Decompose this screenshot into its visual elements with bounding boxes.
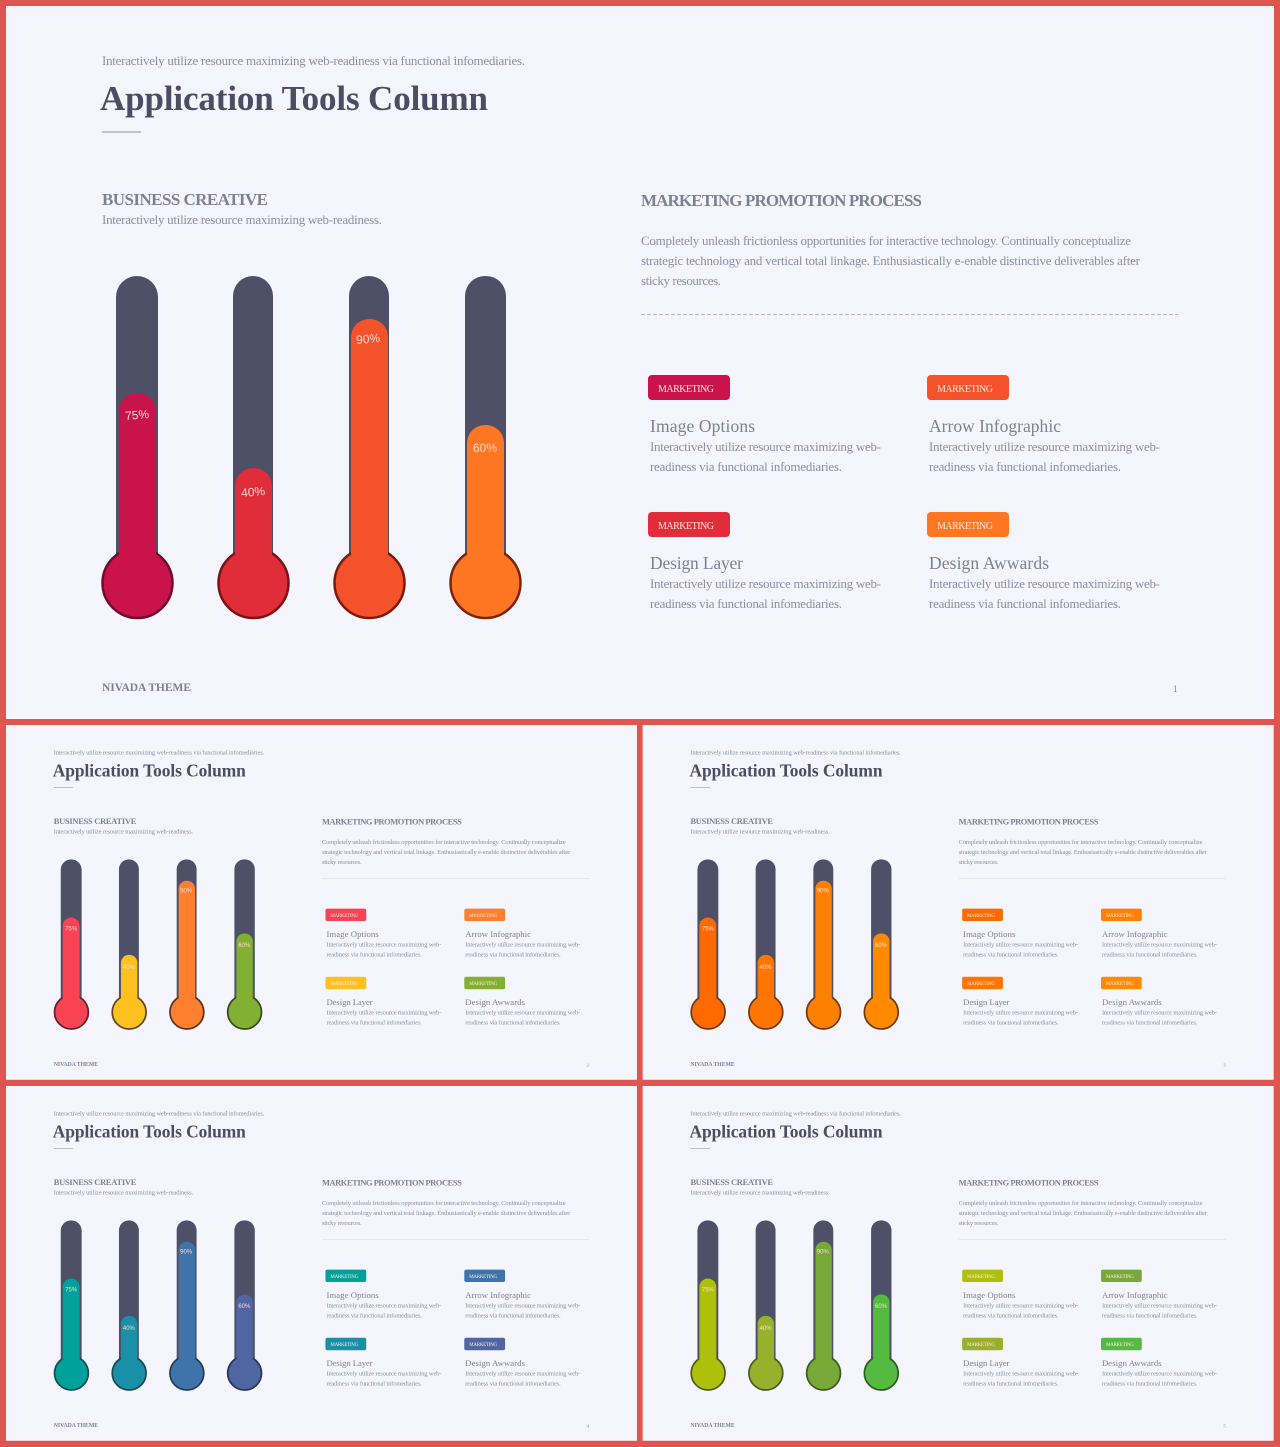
intro text: Interactively utilize resource maximizing web-readiness via functional infomediaries.	[54, 1110, 265, 1117]
thermometer 75%	[55, 1220, 88, 1390]
footer brand: NIVADA THEME	[690, 1423, 735, 1429]
page number: 3	[1223, 1062, 1226, 1067]
item: design layer: readiness via functional infomediaries.	[963, 1381, 1059, 1388]
item: arrow infographic: MARKETING	[937, 384, 993, 395]
item: image options: MARKETING	[967, 914, 995, 919]
item: arrow infographic: MARKETING	[1106, 1275, 1134, 1280]
thermometer 90%	[334, 276, 404, 618]
heading: marketing promotion process: MARKETING PROMOTION PROCESS	[959, 1178, 1099, 1188]
item: design layer: readiness via functional infomediaries.	[963, 1020, 1059, 1027]
item: design awwards: Interactively utilize resource maximizing web-	[1102, 1371, 1217, 1378]
item: arrow infographic	[927, 375, 1160, 474]
subheading: Interactively utilize resource maximizing web-readiness.	[102, 212, 382, 227]
panel: orange variant slide	[643, 725, 1274, 1080]
heading: business creative: BUSINESS CREATIVE	[54, 1177, 137, 1187]
thermometer 60%: 60%	[875, 1304, 888, 1310]
item: design layer	[962, 977, 1078, 1027]
thermometer 90%: 90%	[180, 1250, 193, 1256]
item: design awwards: readiness via functional infomediaries.	[1102, 1020, 1198, 1027]
item: image options: Image Options	[326, 929, 379, 939]
thermometer chart	[55, 1220, 262, 1390]
subheading: Interactively utilize resource maximizing web-readiness.	[690, 828, 830, 835]
item: design awwards: Design Awwards	[1102, 1358, 1162, 1368]
item: arrow infographic: Interactively utilize resource maximizing web-	[1102, 941, 1217, 948]
item: arrow infographic: Arrow Infographic	[465, 929, 531, 939]
paragraph: Completely unleash frictionless opportunities for interactive technology. Continually conceptualize	[959, 839, 1203, 846]
thermometer 75%: 75%	[65, 1287, 78, 1293]
thermometer 40%: 40%	[760, 1326, 772, 1332]
item: image options: readiness via functional infomediaries.	[326, 951, 422, 958]
item: arrow infographic: readiness via functional infomediaries.	[1102, 1312, 1198, 1319]
item: image options	[648, 375, 881, 474]
item: image options	[962, 909, 1078, 958]
item: arrow infographic: Arrow Infographic	[465, 1290, 531, 1300]
paragraph	[322, 839, 571, 866]
item: design layer: Interactively utilize resource maximizing web-	[326, 1010, 441, 1017]
item: design layer: Design Layer	[963, 997, 1010, 1007]
thermometer 90%: 90%	[180, 889, 193, 895]
item: design awwards: readiness via functional infomediaries.	[1102, 1381, 1198, 1388]
item: design awwards	[1101, 1338, 1217, 1388]
page number: 2	[587, 1062, 589, 1067]
thermometer 75%: 75%	[702, 926, 715, 932]
title: Application Tools Column	[100, 79, 488, 118]
intro text: Interactively utilize resource maximizing web-readiness via functional infomediaries.	[102, 53, 525, 68]
item: arrow infographic	[464, 909, 580, 958]
item: design layer: MARKETING	[967, 1343, 995, 1348]
thermometer 75%	[691, 859, 725, 1029]
item: image options: readiness via functional infomediaries.	[963, 951, 1059, 958]
thermometer 40%: 40%	[241, 484, 266, 500]
thermometer 40%	[112, 859, 146, 1029]
thermometer chart	[691, 859, 898, 1029]
paragraph: sticky resources.	[641, 273, 721, 288]
item: design awwards: MARKETING	[937, 521, 993, 532]
item: design layer: readiness via functional infomediaries.	[326, 1020, 422, 1027]
heading: marketing promotion process: MARKETING PROMOTION PROCESS	[322, 1178, 462, 1188]
footer brand: NIVADA THEME	[690, 1062, 735, 1068]
item: design awwards: Interactively utilize resource maximizing web-	[929, 576, 1160, 591]
item: image options	[962, 1270, 1078, 1319]
heading: marketing promotion process: MARKETING PROMOTION PROCESS	[322, 817, 462, 827]
paragraph: strategic technology and vertical total linkage. Enthusiastically e-enable distinctive deliverables after	[322, 849, 571, 856]
thermometer 60%	[864, 859, 898, 1029]
item: image options: Interactively utilize resource maximizing web-	[326, 1302, 441, 1309]
item: design awwards	[464, 1338, 580, 1388]
paragraph: Completely unleash frictionless opportunities for interactive technology. Continually conceptualize	[959, 1200, 1203, 1207]
item: arrow infographic: Arrow Infographic	[929, 416, 1061, 436]
thermometer 60%: 60%	[238, 1304, 251, 1310]
thermometer 40%	[749, 1220, 783, 1390]
intro text: Interactively utilize resource maximizing web-readiness via functional infomediaries.	[54, 749, 265, 756]
item: image options: Image Options	[963, 929, 1016, 939]
item: design layer	[325, 977, 441, 1027]
paragraph: sticky resources.	[959, 1220, 999, 1227]
thermometer 60%	[864, 1220, 898, 1390]
item: design awwards	[1101, 977, 1217, 1027]
item: design layer: Design Layer	[326, 1358, 373, 1368]
paragraph: sticky resources.	[959, 859, 999, 866]
thermometer 75%: 75%	[125, 407, 150, 423]
item: arrow infographic	[1101, 1270, 1217, 1319]
subheading: Interactively utilize resource maximizing web-readiness.	[690, 1189, 830, 1196]
item: design awwards: Interactively utilize resource maximizing web-	[465, 1010, 580, 1017]
item: design awwards: Design Awwards	[1102, 997, 1162, 1007]
intro text: Interactively utilize resource maximizing web-readiness via functional infomediaries.	[690, 749, 901, 756]
item: design layer: Design Layer	[326, 997, 373, 1007]
item: design awwards: Design Awwards	[465, 1358, 526, 1368]
item: design awwards	[927, 512, 1160, 611]
thermometer 40%: 40%	[123, 965, 136, 971]
item: arrow infographic	[464, 1270, 580, 1319]
title: Application Tools Column	[53, 1122, 246, 1142]
item: arrow infographic	[1101, 909, 1217, 958]
item: arrow infographic: Arrow Infographic	[1102, 1290, 1168, 1300]
item: arrow infographic: MARKETING	[469, 1275, 498, 1280]
item: image options	[325, 1270, 441, 1319]
item: arrow infographic: readiness via functional infomediaries.	[465, 951, 561, 958]
item: image options: Image Options	[963, 1290, 1016, 1300]
thermometer 75%	[55, 859, 88, 1029]
item: design layer: MARKETING	[658, 521, 714, 532]
item: image options: Image Options	[326, 1290, 379, 1300]
subheading: Interactively utilize resource maximizing web-readiness.	[54, 828, 193, 835]
item: arrow infographic: readiness via functional infomediaries.	[929, 459, 1121, 474]
footer brand: NIVADA THEME	[54, 1423, 98, 1429]
item: image options: readiness via functional infomediaries.	[963, 1312, 1059, 1319]
item: image options: Interactively utilize resource maximizing web-	[650, 439, 881, 454]
item: design layer: MARKETING	[330, 1343, 359, 1348]
item: design awwards: readiness via functional infomediaries.	[465, 1020, 561, 1027]
panel: green variant slide	[643, 1086, 1274, 1441]
thermometer chart	[102, 276, 520, 618]
heading: business creative: BUSINESS CREATIVE	[690, 1177, 773, 1187]
thermometer 90%: 90%	[356, 331, 381, 347]
title: Application Tools Column	[689, 761, 883, 781]
paragraph: sticky resources.	[322, 1220, 362, 1227]
item: design layer: Design Layer	[963, 1358, 1010, 1368]
paragraph: sticky resources.	[322, 859, 362, 866]
item: design layer: Interactively utilize resource maximizing web-	[650, 576, 881, 591]
page number: 1	[1173, 684, 1178, 694]
item: image options: MARKETING	[658, 384, 714, 395]
item: image options: Interactively utilize resource maximizing web-	[963, 941, 1078, 948]
item: design awwards: MARKETING	[1106, 1343, 1134, 1348]
title: Application Tools Column	[689, 1122, 883, 1142]
item: design layer: Interactively utilize resource maximizing web-	[326, 1371, 441, 1378]
item: arrow infographic: Arrow Infographic	[1102, 929, 1168, 939]
paragraph: Completely unleash frictionless opportunities for interactive technology. Continually conceptualize	[322, 1200, 566, 1207]
item: design layer: MARKETING	[330, 982, 359, 987]
item: arrow infographic: readiness via functional infomediaries.	[465, 1312, 561, 1319]
thermometer 90%: 90%	[817, 889, 829, 895]
thermometer 90%	[807, 859, 840, 1029]
item: image options: MARKETING	[330, 914, 359, 919]
item: arrow infographic: readiness via functional infomediaries.	[1102, 951, 1198, 958]
page number: 4	[587, 1423, 590, 1428]
item: image options: MARKETING	[967, 1275, 995, 1280]
item: arrow infographic: Interactively utilize resource maximizing web-	[465, 1302, 580, 1309]
thermometer 75%	[691, 1220, 725, 1390]
item: image options: Image Options	[650, 416, 755, 436]
thermometer 60%: 60%	[238, 943, 251, 949]
heading: marketing promotion process: MARKETING PROMOTION PROCESS	[959, 817, 1099, 827]
thermometer 60%: 60%	[473, 441, 497, 455]
paragraph	[641, 233, 1141, 288]
item: design layer: MARKETING	[967, 982, 995, 987]
footer brand: NIVADA THEME	[102, 682, 191, 694]
paragraph	[959, 1200, 1208, 1227]
item: arrow infographic: MARKETING	[469, 914, 498, 919]
item: arrow infographic: Interactively utilize resource maximizing web-	[465, 941, 580, 948]
thermometer 60%	[228, 1220, 262, 1390]
paragraph: strategic technology and vertical total linkage. Enthusiastically e-enable distinctive deliverables after	[959, 849, 1208, 856]
heading: business creative: BUSINESS CREATIVE	[690, 816, 773, 826]
thermometer 90%	[170, 1220, 204, 1390]
paragraph: Completely unleash frictionless opportunities for interactive technology. Continually conceptualize	[641, 233, 1131, 248]
thermometer 75%: 75%	[65, 926, 78, 932]
thermometer chart	[691, 1220, 898, 1390]
item: design layer: Design Layer	[650, 553, 743, 573]
item: design awwards: readiness via functional infomediaries.	[929, 596, 1121, 611]
thermometer 60%	[450, 276, 520, 618]
item: design awwards: Interactively utilize resource maximizing web-	[1102, 1010, 1217, 1017]
thermometer 40%	[218, 276, 288, 618]
page number: 5	[1223, 1423, 1226, 1428]
title: Application Tools Column	[53, 761, 246, 781]
intro text: Interactively utilize resource maximizing web-readiness via functional infomediaries.	[690, 1110, 901, 1117]
thermometer 40%	[112, 1220, 146, 1390]
thermometer 40%	[749, 859, 783, 1029]
footer brand: NIVADA THEME	[54, 1062, 98, 1068]
thermometer 90%	[170, 859, 204, 1029]
paragraph: strategic technology and vertical total linkage. Enthusiastically e-enable distinctive deliverables after	[959, 1210, 1208, 1217]
subheading: Interactively utilize resource maximizing web-readiness.	[54, 1189, 193, 1196]
thermometer 90%: 90%	[817, 1250, 829, 1256]
paragraph	[322, 1200, 571, 1227]
thermometer 40%: 40%	[760, 965, 772, 971]
item: design awwards: readiness via functional infomediaries.	[465, 1381, 561, 1388]
item: image options: readiness via functional infomediaries.	[650, 459, 842, 474]
item: design awwards: MARKETING	[1106, 982, 1134, 987]
item: arrow infographic: Interactively utilize resource maximizing web-	[929, 439, 1160, 454]
thermometer 90%	[807, 1220, 840, 1390]
item: design awwards	[464, 977, 580, 1027]
item: design layer	[648, 512, 881, 611]
item: design awwards: MARKETING	[469, 1343, 498, 1348]
panel: red yellow variant slide	[6, 725, 637, 1080]
item: image options: Interactively utilize resource maximizing web-	[963, 1302, 1078, 1309]
item: arrow infographic: MARKETING	[1106, 914, 1134, 919]
item: design layer: Interactively utilize resource maximizing web-	[963, 1010, 1078, 1017]
item: design layer	[962, 1338, 1078, 1388]
item: design layer: readiness via functional infomediaries.	[326, 1381, 422, 1388]
thermometer 60%	[228, 859, 262, 1029]
heading: business creative: BUSINESS CREATIVE	[102, 190, 268, 209]
item: design awwards: MARKETING	[469, 982, 498, 987]
item: design layer	[325, 1338, 441, 1388]
heading: business creative: BUSINESS CREATIVE	[54, 816, 137, 826]
heading: marketing promotion process: MARKETING PROMOTION PROCESS	[641, 191, 922, 210]
thermometer 40%: 40%	[123, 1326, 136, 1332]
item: arrow infographic: Interactively utilize resource maximizing web-	[1102, 1302, 1217, 1309]
item: image options: Interactively utilize resource maximizing web-	[326, 941, 441, 948]
thermometer 75%	[102, 276, 172, 618]
item: image options	[325, 909, 441, 958]
thermometer chart	[55, 859, 262, 1029]
item: image options: readiness via functional infomediaries.	[326, 1312, 422, 1319]
item: design layer: Interactively utilize resource maximizing web-	[963, 1371, 1078, 1378]
item: design awwards: Design Awwards	[465, 997, 526, 1007]
thermometer 60%: 60%	[875, 943, 888, 949]
paragraph: strategic technology and vertical total linkage. Enthusiastically e-enable distinctive deliverables after	[641, 253, 1141, 268]
item: design awwards: Design Awwards	[929, 553, 1049, 573]
paragraph: Completely unleash frictionless opportunities for interactive technology. Continually conceptualize	[322, 839, 566, 846]
panel: main slide	[6, 6, 1274, 719]
item: image options: MARKETING	[330, 1275, 359, 1280]
panel: teal blue variant slide	[6, 1086, 637, 1441]
item: design layer: readiness via functional infomediaries.	[650, 596, 842, 611]
paragraph	[959, 839, 1208, 866]
thermometer 75%: 75%	[702, 1287, 715, 1293]
item: design awwards: Interactively utilize resource maximizing web-	[465, 1371, 580, 1378]
paragraph: strategic technology and vertical total linkage. Enthusiastically e-enable distinctive deliverables after	[322, 1210, 571, 1217]
